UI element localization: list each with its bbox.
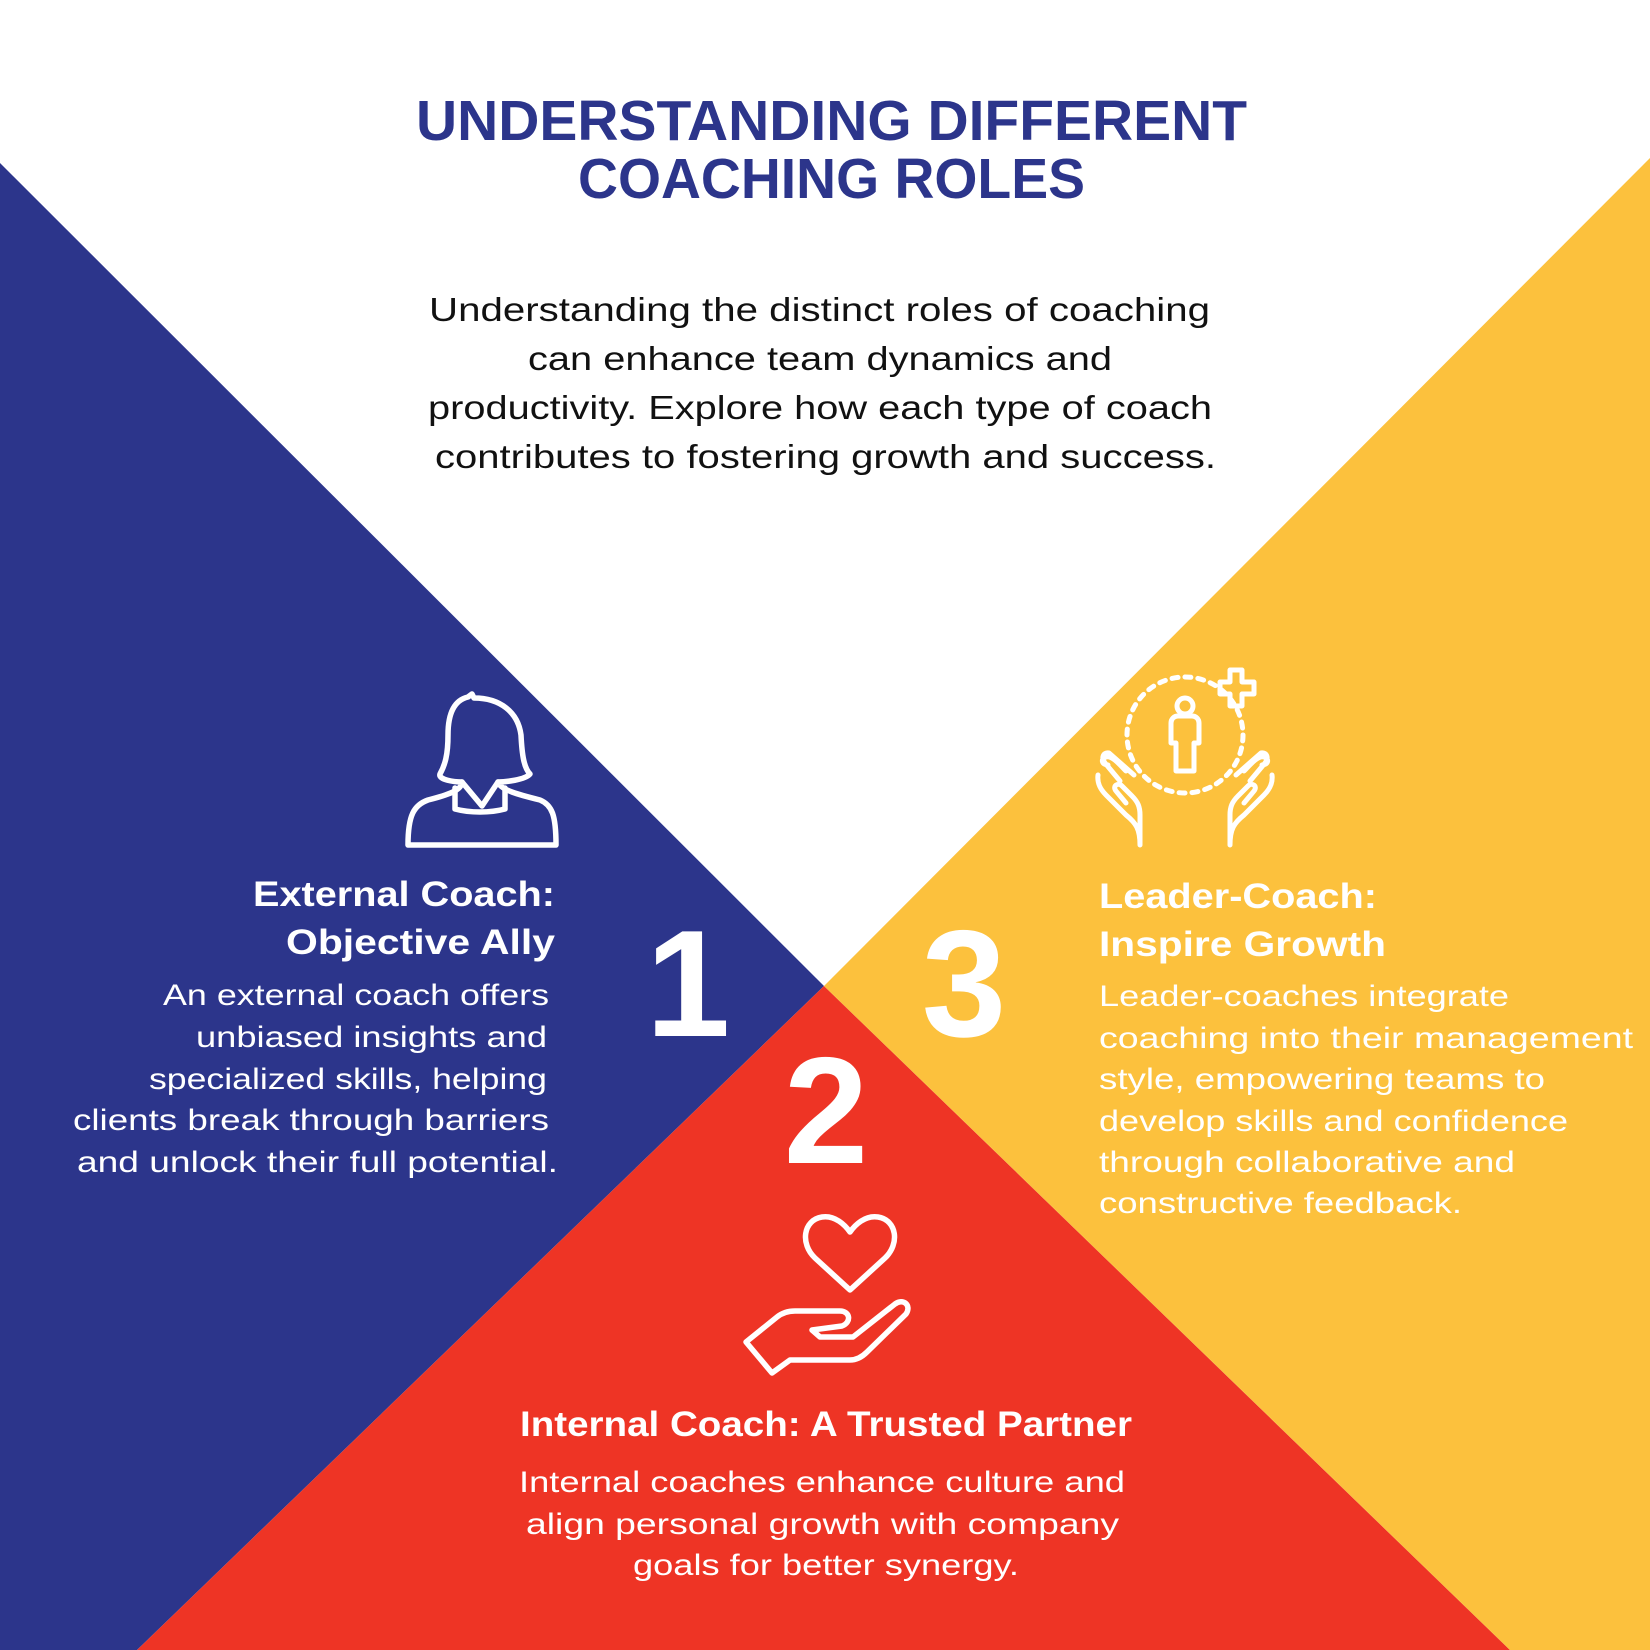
- subtitle: Understanding the distinct roles of coaching: [429, 291, 1210, 328]
- panel: red triangle: [137, 986, 1510, 1650]
- text: leader-coach body: Leader-coaches integrate: [1099, 980, 1509, 1013]
- text: internal coach body: goals for better synergy.: [633, 1549, 1019, 1582]
- number 1: 1: [646, 899, 730, 1069]
- heading: external coach: [253, 875, 556, 962]
- text: external coach body: An external coach offers: [163, 979, 549, 1012]
- text: leader-coach body: through collaborative and: [1099, 1146, 1515, 1179]
- heading: external coach: External Coach:: [253, 875, 555, 914]
- text: internal coach body: [519, 1466, 1125, 1582]
- subtitle: contributes to fostering growth and success.: [435, 438, 1216, 475]
- number 3: 3: [922, 899, 1006, 1069]
- subtitle: [428, 291, 1216, 475]
- heading: internal coach: Internal Coach: A Trusted Partner: [520, 1405, 1132, 1444]
- text: internal coach body: align personal growth with company: [526, 1508, 1119, 1541]
- text: internal coach body: Internal coaches enhance culture and: [519, 1466, 1125, 1499]
- title: UNDERSTANDING DIFFERENT: [416, 89, 1247, 153]
- icon: person: [408, 694, 556, 845]
- heading: external coach: Objective Ally: [286, 923, 556, 962]
- number 2: 2: [784, 1026, 868, 1196]
- heading: leader-coach: Leader-Coach:: [1099, 877, 1377, 916]
- text: leader-coach body: style, empowering teams to: [1099, 1063, 1545, 1096]
- heading: leader-coach: Inspire Growth: [1099, 925, 1386, 964]
- icon: heart in hand: [746, 1217, 908, 1373]
- text: external coach body: clients break through barriers: [73, 1104, 549, 1137]
- text: external coach body: unbiased insights and: [196, 1021, 547, 1054]
- text: external coach body: specialized skills, helping: [149, 1063, 547, 1096]
- subtitle: productivity. Explore how each type of coach: [428, 389, 1212, 426]
- text: leader-coach body: [1099, 980, 1634, 1220]
- icon: hands with person: [1098, 670, 1272, 845]
- text: leader-coach body: coaching into their management: [1099, 1022, 1634, 1055]
- heading: leader-coach: [1099, 877, 1386, 964]
- title: COACHING ROLES: [578, 147, 1085, 211]
- text: leader-coach body: develop skills and confidence: [1099, 1105, 1568, 1138]
- text: leader-coach body: constructive feedback.: [1099, 1187, 1462, 1220]
- text: external coach body: [73, 979, 558, 1179]
- panel: blue triangle: [0, 163, 824, 1650]
- subtitle: can enhance team dynamics and: [528, 340, 1112, 377]
- title: [416, 89, 1247, 211]
- text: external coach body: and unlock their full potential.: [77, 1146, 558, 1179]
- panel: yellow triangle: [824, 158, 1650, 1650]
